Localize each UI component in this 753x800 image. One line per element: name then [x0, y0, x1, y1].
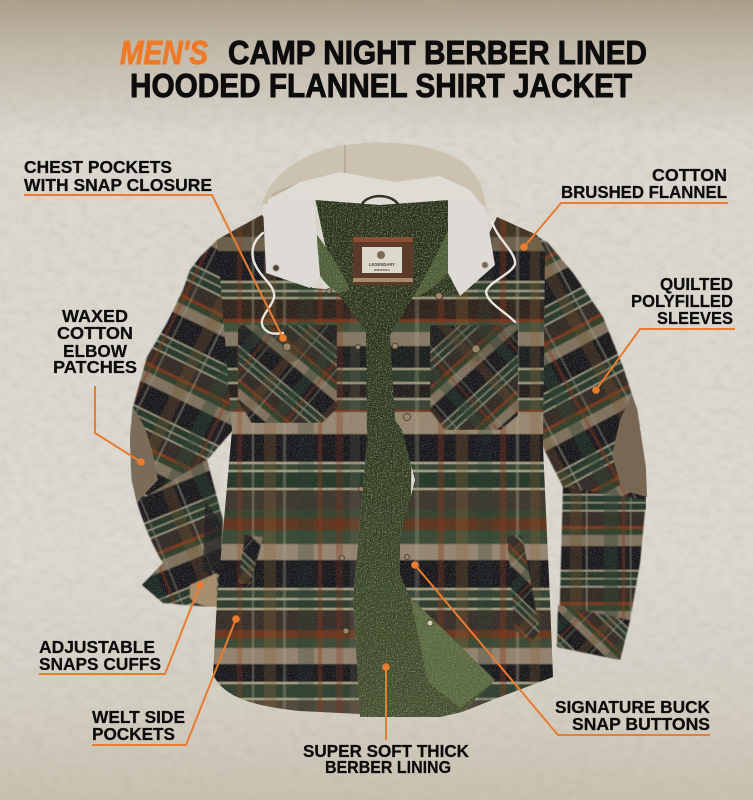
callout: chest pockets: CHEST POCKETS — [24, 157, 172, 177]
callout: cotton brushed flannel — [520, 165, 728, 251]
left pocket flap — [238, 325, 337, 362]
hood outer — [262, 143, 486, 210]
hood crease shadow — [272, 145, 345, 195]
hood drawstrings — [252, 222, 515, 334]
callout: chest pockets — [24, 157, 287, 342]
callout: super soft thick berber lining: BERBER LINING — [325, 757, 451, 777]
label wordmark: LEGENDARY — [369, 262, 395, 267]
right eyelet — [482, 262, 488, 268]
callout: quilted polyfilled sleeves: SLEEVES — [657, 308, 733, 328]
hood — [262, 143, 495, 296]
callout: adjustable snaps cuffs: SNAPS CUFFS — [39, 654, 161, 674]
right chest pocket — [430, 325, 518, 430]
brand neck label — [353, 237, 413, 285]
callout: waxed cotton elbow patches — [53, 306, 145, 466]
left elbow patch — [130, 407, 158, 502]
right pocket flap — [430, 325, 518, 362]
hood inner fold — [268, 172, 486, 212]
title line two: HOODED FLANNEL SHIRT JACKET — [130, 67, 632, 104]
callout: quilted polyfilled sleeves: POLYFILLED — [631, 291, 733, 311]
berber lining — [315, 198, 495, 717]
title line one: CAMP NIGHT BERBER LINED — [228, 34, 647, 71]
callout: super soft thick berber lining: SUPER SOFT THICK — [303, 741, 469, 761]
left hood lapel — [263, 196, 320, 288]
callout: signature buck snap buttons: SIGNATURE BUCK — [555, 697, 710, 717]
callout: waxed cotton elbow patches: ELBOW — [63, 341, 127, 361]
left sleeve — [130, 215, 262, 607]
callout: adjustable snaps cuffs: ADJUSTABLE — [39, 637, 155, 657]
right hood lapel — [448, 198, 495, 296]
callout: welt side pockets: POCKETS — [92, 724, 175, 744]
callout: welt side pockets — [92, 615, 240, 745]
jacket illustration — [130, 143, 647, 730]
left welt side pocket — [238, 535, 263, 585]
callout: chest pockets: WITH SNAP CLOSURE — [24, 175, 212, 195]
title accent: MEN'S: MEN'S — [120, 34, 208, 71]
right elbow patch — [612, 395, 647, 497]
hanger loop — [362, 196, 398, 204]
lighter berber collar left — [317, 235, 350, 294]
brand neck label: WHITETAILS — [374, 268, 390, 272]
callout: waxed cotton elbow patches: COTTON — [57, 323, 133, 343]
right welt side pocket — [507, 535, 540, 642]
snap buttons — [283, 288, 480, 634]
lighter berber collar right — [412, 225, 450, 299]
callout: waxed cotton elbow patches: PATCHES — [53, 357, 137, 377]
callout: signature buck snap buttons — [411, 561, 710, 735]
flannel body — [213, 215, 553, 714]
label crest — [377, 251, 385, 259]
left eyelet — [273, 265, 279, 271]
callout: cotton brushed flannel: BRUSHED FLANNEL — [561, 182, 727, 202]
lining flap — [410, 597, 495, 708]
callout: super soft thick berber lining — [303, 663, 469, 777]
callout: quilted polyfilled sleeves — [592, 274, 735, 394]
left chest pocket — [238, 325, 337, 423]
callout: welt side pockets: WELT SIDE — [92, 707, 185, 727]
callout: adjustable snaps cuffs — [39, 581, 204, 674]
right sleeve — [530, 232, 646, 660]
title — [120, 34, 647, 104]
callout: signature buck snap buttons: SNAP BUTTONS — [572, 714, 710, 734]
callout: waxed cotton elbow patches: WAXED — [62, 306, 128, 326]
callout: quilted polyfilled sleeves: QUILTED — [660, 274, 733, 294]
callout: cotton brushed flannel: COTTON — [652, 165, 727, 185]
